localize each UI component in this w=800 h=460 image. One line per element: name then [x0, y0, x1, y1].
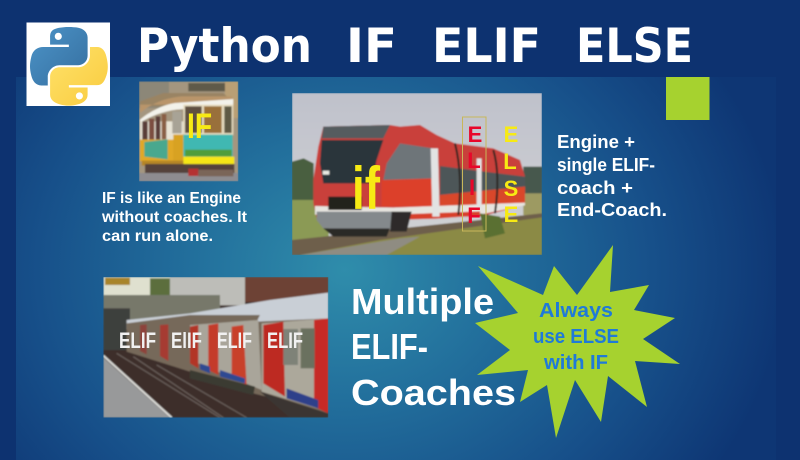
- train label: ELIF box: E: [468, 122, 482, 147]
- text: multiple elif coaches: Coaches: [351, 372, 516, 413]
- train label: ELIF box: [462, 117, 486, 231]
- title: Python: [137, 19, 312, 74]
- text: single elif description: single ELIF-: [557, 154, 655, 175]
- text: multiple elif coaches: ELIF-: [351, 326, 428, 367]
- tube labels: ELIF x4: [119, 328, 303, 353]
- train label: ELIF box: F: [467, 203, 481, 228]
- text: multiple elif coaches: [351, 281, 516, 413]
- icon: python logo: [26, 22, 110, 106]
- train label: ELSE: E: [504, 202, 518, 227]
- train label: ELIF box: I: [469, 175, 475, 200]
- title: [137, 19, 693, 74]
- title: ELSE: [576, 19, 693, 74]
- tube labels: ELIF x4: ELIF: [119, 328, 156, 353]
- tube labels: ELIF x4: ElIF: [171, 328, 202, 353]
- image: red train: [292, 93, 542, 255]
- decorative green square: [666, 77, 710, 120]
- image: underground train: [103, 277, 328, 418]
- text: single elif description: End-Coach.: [557, 199, 667, 220]
- callout text: use ELSE: [533, 326, 619, 348]
- callout text: [533, 300, 619, 374]
- train label: ELSE: E: [504, 122, 518, 147]
- tram label: IF: IF: [187, 107, 212, 146]
- text: if description: can run alone.: [102, 228, 213, 245]
- callout: green star: [475, 245, 680, 438]
- text: single elif description: Engine +: [557, 131, 635, 152]
- text: if description: [101, 190, 248, 245]
- title: ELIF: [432, 19, 541, 74]
- train label: if: if: [352, 155, 381, 222]
- train label: ELSE: L: [503, 149, 517, 174]
- tube labels: ELIF x4: ELIF: [267, 328, 303, 353]
- text: multiple elif coaches: Multiple: [351, 281, 494, 322]
- callout text: Always: [539, 300, 613, 322]
- image: yellow tram: [139, 81, 238, 181]
- tube labels: ELIF x4: ELIF: [217, 328, 252, 353]
- train label: ELIF box: L: [467, 148, 481, 173]
- text: single elif description: [557, 131, 667, 220]
- train label: ELSE: S: [504, 176, 518, 201]
- text: if description: without coaches. It: [101, 209, 248, 226]
- train label: ELSE: [503, 122, 518, 227]
- callout text: with IF: [543, 352, 608, 374]
- text: single elif description: coach +: [557, 177, 633, 198]
- title: IF: [346, 19, 397, 74]
- text: if description: IF is like an Engine: [102, 190, 241, 207]
